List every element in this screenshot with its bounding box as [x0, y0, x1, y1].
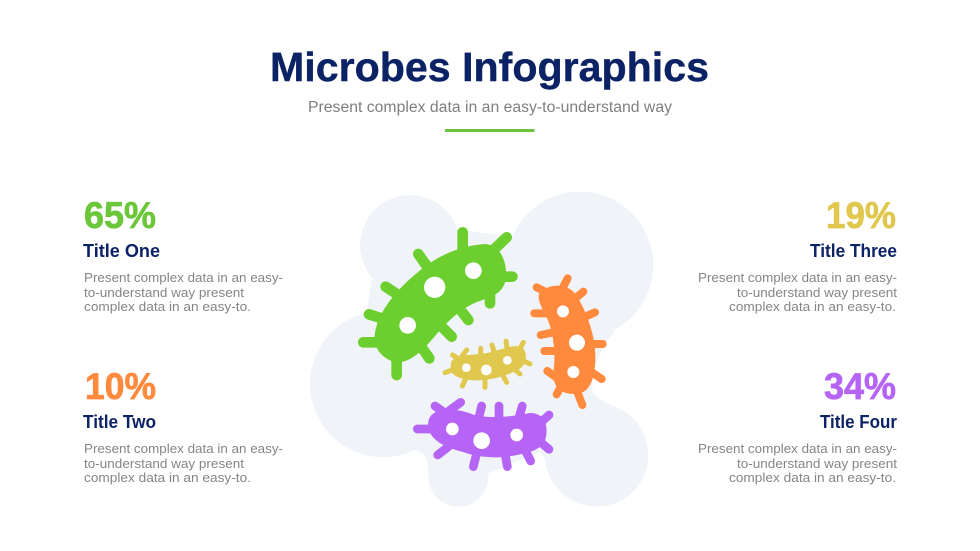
orange microbe	[534, 278, 603, 405]
title: Microbes Infographics	[270, 44, 709, 90]
heading: title one: Title One	[83, 241, 160, 261]
body text: to-understand way present	[737, 456, 897, 471]
percentage 34%: 34%	[824, 366, 896, 407]
body text	[698, 441, 897, 485]
body text: Present complex data in an easy-	[84, 441, 283, 456]
body text: Present complex data in an easy-	[84, 270, 283, 285]
panel: title three	[698, 195, 897, 314]
heading: title three: Title Three	[810, 241, 897, 261]
percentage 65%: 65%	[84, 195, 156, 236]
yellow microbe	[445, 341, 530, 387]
accent underline	[445, 129, 534, 132]
body text: Present complex data in an easy-	[698, 270, 897, 285]
body text: to-understand way present	[84, 285, 244, 300]
green microbe	[363, 232, 512, 375]
body text: complex data in an easy-to.	[729, 299, 896, 314]
heading: title two: Title Two	[83, 412, 156, 432]
body text	[84, 270, 283, 314]
heading: title four: Title Four	[820, 412, 897, 432]
percentage 10%: 10%	[85, 366, 156, 407]
body text: complex data in an easy-to.	[729, 470, 896, 485]
panel: title one	[83, 195, 283, 314]
body text: complex data in an easy-to.	[84, 470, 251, 485]
body text: Present complex data in an easy-	[698, 441, 897, 456]
body text	[84, 441, 283, 485]
body text	[698, 270, 897, 314]
subtitle: Present complex data in an easy-to-understand way	[308, 99, 672, 116]
panel: title two	[83, 366, 283, 485]
body text: complex data in an easy-to.	[84, 299, 251, 314]
purple microbe	[417, 402, 549, 467]
body text: to-understand way present	[84, 456, 244, 471]
percentage 19%: 19%	[826, 195, 896, 236]
panel: title four	[698, 366, 897, 485]
body text: to-understand way present	[737, 285, 897, 300]
central illustration: microbes on blob	[310, 192, 653, 507]
background blob	[310, 192, 653, 507]
